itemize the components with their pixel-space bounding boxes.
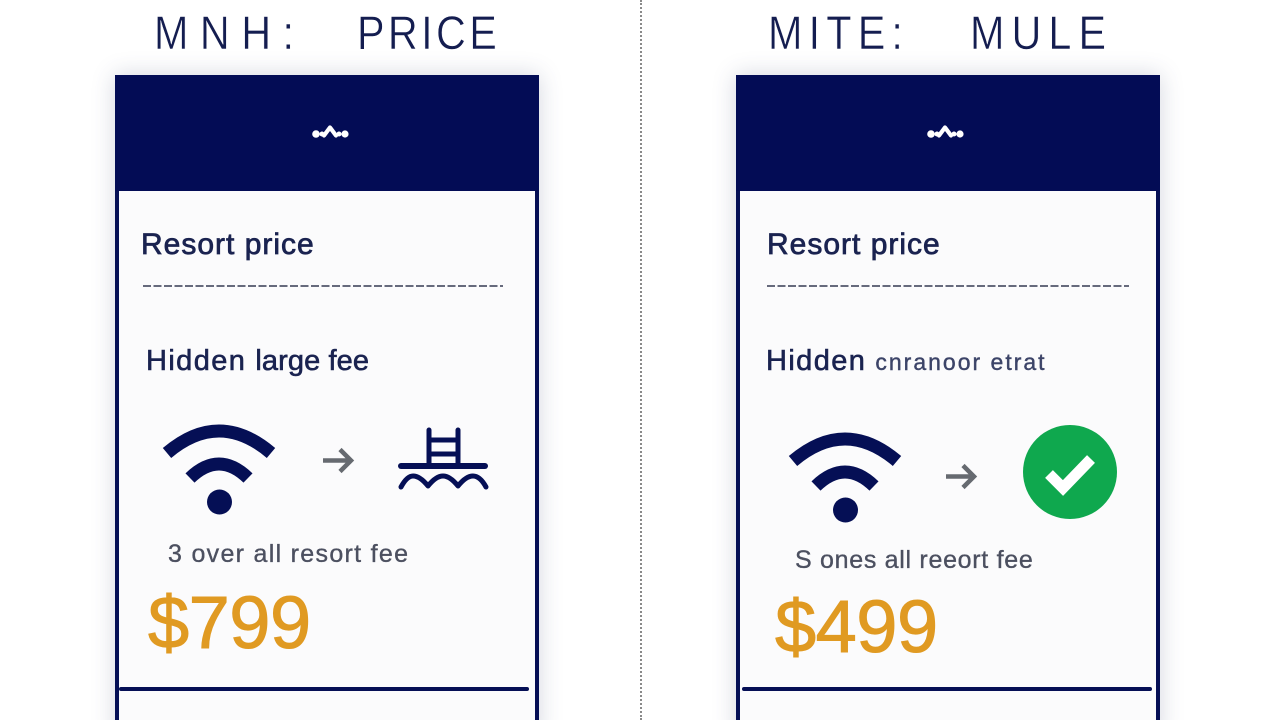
left bottom rule	[119, 687, 529, 691]
panel: left card	[115, 75, 539, 720]
title: right: MULE	[970, 6, 1113, 59]
left heading: resort price: Resort price	[141, 228, 315, 261]
panel: right card	[736, 75, 1160, 720]
icon: right wifi	[788, 432, 902, 522]
right dashed rule	[767, 285, 1129, 287]
left dashed rule	[143, 285, 503, 287]
title: right	[768, 6, 1113, 59]
arrow: left	[323, 448, 354, 474]
arrow: right	[946, 464, 978, 490]
right heading: resort price: Resort price	[767, 228, 941, 261]
icon: left wifi	[162, 424, 276, 514]
right fee text: S ones all reeort fee	[795, 546, 1033, 574]
left label: hidden fee: Hidden large fee	[146, 345, 369, 377]
title: right: MITE:	[768, 6, 909, 59]
icon: right header glyph	[927, 125, 964, 138]
icon: green check	[1023, 425, 1117, 519]
right bottom rule	[742, 687, 1152, 691]
divider	[640, 0, 642, 720]
title: left: PRICE	[357, 6, 500, 59]
icon: pool ladder	[398, 428, 488, 490]
right label: hidden fee: Hidden cnranoor etrat	[766, 345, 1047, 377]
left fee text: 3 over all resort fee	[168, 540, 409, 568]
icon: left header glyph	[312, 125, 349, 138]
right price: $499	[775, 585, 938, 668]
card header band	[736, 75, 1160, 191]
title: left: MNH:	[154, 6, 305, 59]
title: left	[154, 6, 500, 59]
left price: $799	[148, 581, 311, 664]
card header band	[115, 75, 539, 191]
